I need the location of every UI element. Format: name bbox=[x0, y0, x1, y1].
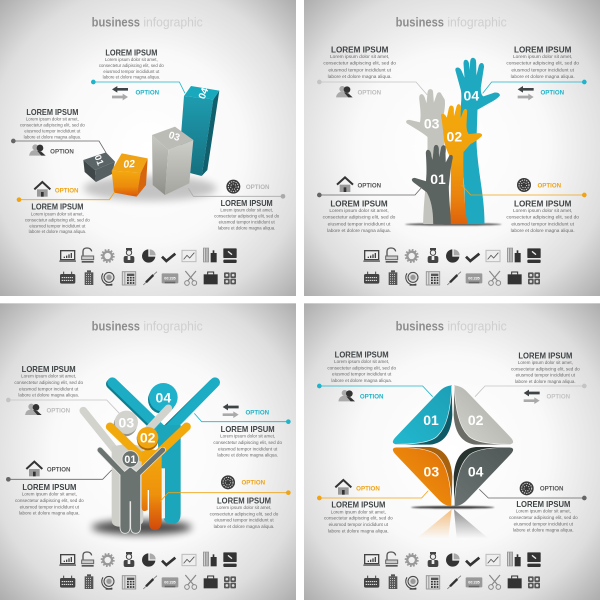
text block left: consectetur adipiscing elit, sed do bbox=[20, 123, 85, 129]
icon set: 00:235 bbox=[164, 580, 176, 584]
text block top left: consectetur adipiscing elit, sed do bbox=[323, 61, 396, 67]
option: globe orange bbox=[517, 178, 562, 192]
option: users teal: OPTION bbox=[360, 394, 384, 401]
option: users dark bbox=[29, 144, 74, 156]
3D bar chart bbox=[83, 86, 219, 201]
text block top left: Lorem ipsum dolor sit amet, bbox=[330, 54, 389, 60]
text block top right: labore et dolore magna aliqua. bbox=[515, 379, 576, 385]
text block top left bbox=[323, 44, 396, 80]
text block bottom right: Lorem ipsum dolor sit amet, bbox=[216, 505, 271, 511]
text block top right: eiusmod tempor incididunt ut bbox=[516, 373, 576, 379]
text block top left: consectetur adipiscing elit, sed do bbox=[327, 365, 396, 371]
text block top right: LOREM IPSUM bbox=[518, 350, 572, 360]
option: house orange: OPTION bbox=[356, 486, 380, 493]
hand 03: 03 bbox=[424, 116, 440, 132]
text block right: labore et dolore magna aliqua. bbox=[218, 225, 275, 231]
option: globe grey: OPTION bbox=[246, 184, 270, 191]
text block top left: eiusmod tempor incididunt ut bbox=[328, 67, 392, 73]
hand 01: 01 bbox=[430, 171, 446, 187]
title bbox=[396, 319, 507, 334]
text block top left: LOREM IPSUM bbox=[331, 44, 388, 54]
bar 01: 01 bbox=[93, 154, 105, 167]
text block bottom right: LOREM IPSUM bbox=[217, 495, 271, 505]
option: arrows teal: OPTION bbox=[135, 90, 160, 97]
text block right: labore et dolore magna aliqua. bbox=[217, 453, 278, 459]
text block bottom right bbox=[210, 495, 279, 530]
text block top right: Lorem ipsum dolor sit amet, bbox=[513, 54, 572, 60]
bar 04: 04 bbox=[197, 86, 211, 101]
text block top right bbox=[511, 350, 580, 385]
option: house orange bbox=[34, 182, 79, 197]
option: house dark bbox=[337, 177, 382, 192]
option: users light: OPTION bbox=[46, 407, 71, 414]
title: business bbox=[92, 15, 140, 30]
text block bottom left: consectetur adipiscing elit, sed do bbox=[15, 498, 84, 504]
icon set bbox=[363, 552, 541, 590]
option: arrows light: OPTION bbox=[546, 394, 571, 401]
text block bottom left: eiusmod tempor incididunt ut bbox=[329, 522, 389, 528]
text block top left: consectetur adipiscing elit, sed do bbox=[14, 380, 83, 386]
title: infographic bbox=[143, 15, 203, 30]
text block top left bbox=[327, 349, 396, 384]
diamond chart bbox=[393, 385, 513, 506]
text block left: Lorem ipsum dolor sit amet, bbox=[26, 117, 79, 123]
text block bottom left: labore et dolore magna aliqua. bbox=[328, 528, 389, 534]
text block top left: eiusmod tempor incididunt ut bbox=[332, 372, 392, 378]
text block bottom left: Lorem ipsum dolor sit amet, bbox=[329, 208, 389, 214]
text block top: consectetur adipiscing elit, sed do bbox=[99, 63, 164, 69]
petal 04: 04 bbox=[468, 463, 484, 479]
title: business bbox=[396, 15, 444, 30]
text block left: LOREM IPSUM bbox=[26, 107, 78, 117]
text block bottom right: Lorem ipsum dolor sit amet, bbox=[513, 208, 572, 214]
text block bottom left: consectetur adipiscing elit, sed do bbox=[324, 516, 393, 522]
option: globe dark: OPTION bbox=[540, 486, 564, 493]
icon set: 00:235 bbox=[164, 276, 176, 280]
text block bottom right: eiusmod tempor incididunt ut bbox=[514, 521, 574, 527]
petal 03: 03 bbox=[424, 463, 439, 479]
person 04 bbox=[111, 382, 215, 524]
text block top left: eiusmod tempor incididunt ut bbox=[19, 386, 79, 392]
option: globe orange: OPTION bbox=[241, 480, 266, 487]
text block right: eiusmod tempor incididunt ut bbox=[219, 220, 275, 226]
text block bottom right: eiusmod tempor incididunt ut bbox=[214, 518, 274, 524]
text block bottom right: consectetur adipiscing elit, sed do bbox=[509, 515, 578, 521]
text block right: consectetur adipiscing elit, sed do bbox=[213, 440, 282, 446]
text block bottom right: labore et dolore magna aliqua. bbox=[513, 528, 574, 534]
text block right: LOREM IPSUM bbox=[221, 424, 275, 434]
text block bottom left: consectetur adipiscing elit, sed do bbox=[323, 215, 396, 221]
panel: hands infographic bbox=[304, 0, 600, 296]
petal 02: 02 bbox=[468, 412, 484, 428]
hand 02 bbox=[442, 105, 481, 223]
connector lines bbox=[6, 398, 291, 502]
option: house dark bbox=[26, 462, 71, 476]
text block bottom left: Lorem ipsum dolor sit amet, bbox=[31, 211, 84, 217]
text block top left: Lorem ipsum dolor sit amet, bbox=[334, 359, 389, 365]
option: arrows teal bbox=[223, 404, 270, 418]
text block top right: consectetur adipiscing elit, sed do bbox=[506, 61, 579, 67]
text block top left: labore et dolore magna aliqua. bbox=[331, 378, 392, 384]
text block top: eiusmod tempor incididunt ut bbox=[103, 69, 160, 75]
text block top right: Lorem ipsum dolor sit amet, bbox=[518, 360, 573, 366]
title: business bbox=[396, 319, 444, 334]
text block bottom left: consectetur adipiscing elit, sed do bbox=[25, 217, 90, 223]
text block bottom right: labore et dolore magna aliqua. bbox=[214, 524, 274, 530]
title: infographic bbox=[143, 319, 203, 334]
hand 02: 02 bbox=[447, 129, 462, 145]
text block bottom right: labore et dolore magna aliqua. bbox=[511, 228, 575, 234]
text block top left bbox=[14, 364, 83, 399]
connector lines bbox=[317, 384, 587, 500]
person 03 bbox=[83, 408, 168, 527]
title: business bbox=[92, 319, 140, 334]
icon set bbox=[59, 552, 237, 590]
person 01 bbox=[100, 450, 163, 533]
option: globe dark bbox=[520, 481, 564, 495]
person 01: 01 bbox=[124, 454, 136, 466]
option: arrows teal bbox=[112, 86, 160, 100]
text block bottom left: labore et dolore magna aliqua. bbox=[327, 228, 391, 234]
option: users dark: OPTION bbox=[50, 149, 74, 156]
text block bottom left bbox=[15, 482, 84, 517]
option: globe orange: OPTION bbox=[537, 182, 562, 189]
person 02: 02 bbox=[140, 430, 156, 446]
text block bottom left: labore et dolore magna aliqua. bbox=[19, 511, 80, 517]
text block top left: labore et dolore magna aliqua. bbox=[18, 393, 79, 399]
text block bottom left: LOREM IPSUM bbox=[331, 500, 385, 510]
text block top left: LOREM IPSUM bbox=[22, 364, 76, 374]
text block bottom left: LOREM IPSUM bbox=[330, 198, 388, 208]
text block right: eiusmod tempor incididunt ut bbox=[218, 446, 278, 452]
text block bottom left: LOREM IPSUM bbox=[22, 482, 76, 492]
text block top right bbox=[506, 44, 579, 80]
text block left bbox=[20, 107, 85, 140]
text block bottom right bbox=[506, 198, 579, 234]
panel: bar chart infographic bbox=[0, 0, 296, 296]
option: arrows teal: OPTION bbox=[245, 409, 270, 416]
connector lines bbox=[317, 80, 587, 197]
text block bottom right: Lorem ipsum dolor sit amet, bbox=[516, 509, 571, 515]
title: infographic bbox=[447, 319, 507, 334]
text block top: LOREM IPSUM bbox=[105, 47, 157, 57]
text block bottom right: eiusmod tempor incididunt ut bbox=[511, 221, 575, 227]
text block bottom left: Lorem ipsum dolor sit amet, bbox=[22, 492, 77, 498]
text block bottom left: labore et dolore magna aliqua. bbox=[29, 229, 86, 235]
option: users teal bbox=[338, 390, 384, 401]
hand 04: 04 bbox=[464, 88, 479, 104]
option: house orange bbox=[335, 480, 380, 495]
option: house orange: OPTION bbox=[55, 187, 79, 194]
people chart bbox=[83, 382, 215, 535]
text block bottom right bbox=[509, 499, 578, 534]
text block top left: labore et dolore magna aliqua. bbox=[328, 74, 392, 80]
person 04: 04 bbox=[156, 389, 171, 405]
text block bottom left bbox=[324, 500, 393, 534]
text block top left: Lorem ipsum dolor sit amet, bbox=[21, 374, 76, 380]
text block bottom right: consectetur adipiscing elit, sed do bbox=[210, 511, 279, 517]
text block right bbox=[214, 198, 279, 231]
reflection bbox=[411, 506, 494, 538]
panel: diamond infographic bbox=[304, 303, 600, 600]
text block top left: LOREM IPSUM bbox=[335, 349, 389, 359]
title: infographic bbox=[447, 15, 507, 30]
option: users light bbox=[336, 86, 382, 97]
person 03: 03 bbox=[119, 414, 134, 430]
petal 01: 01 bbox=[423, 412, 439, 428]
text block left: eiusmod tempor incididunt ut bbox=[24, 129, 81, 135]
text block right: LOREM IPSUM bbox=[221, 198, 273, 208]
text block bottom left bbox=[25, 202, 90, 235]
option: globe grey bbox=[226, 180, 270, 194]
bar 02: 02 bbox=[123, 159, 136, 171]
icon set: 00:235 bbox=[468, 276, 480, 280]
text block left: labore et dolore magna aliqua. bbox=[24, 134, 81, 140]
icon set bbox=[363, 248, 541, 286]
option: users light: OPTION bbox=[357, 90, 382, 97]
text block top right: labore et dolore magna aliqua. bbox=[511, 74, 575, 80]
connector lines bbox=[11, 80, 285, 202]
text block bottom right: LOREM IPSUM bbox=[514, 198, 571, 208]
text block right: Lorem ipsum dolor sit amet, bbox=[220, 208, 273, 214]
text block bottom right: consectetur adipiscing elit, sed do bbox=[506, 215, 579, 221]
icon set: 00:235 bbox=[468, 580, 480, 584]
text block bottom left: eiusmod tempor incididunt ut bbox=[20, 504, 80, 510]
option: house dark: OPTION bbox=[47, 467, 71, 474]
hand 04 bbox=[456, 59, 499, 223]
text block bottom left: eiusmod tempor incididunt ut bbox=[328, 221, 391, 227]
option: arrows light bbox=[524, 390, 571, 404]
text block top bbox=[99, 47, 164, 81]
option: arrows teal bbox=[518, 86, 565, 100]
text block right bbox=[213, 424, 282, 459]
text block top: Lorem ipsum dolor sit amet, bbox=[105, 57, 158, 63]
text block top: labore et dolore magna aliqua. bbox=[103, 75, 160, 81]
hands chart bbox=[405, 59, 502, 226]
option: globe orange bbox=[221, 475, 266, 489]
text block top right: consectetur adipiscing elit, sed do bbox=[511, 366, 580, 372]
text block right: Lorem ipsum dolor sit amet, bbox=[220, 434, 275, 440]
title bbox=[92, 15, 203, 30]
title bbox=[396, 15, 507, 30]
hand 01 bbox=[413, 146, 452, 223]
person 02 bbox=[110, 427, 187, 530]
icon set bbox=[59, 248, 237, 286]
title bbox=[92, 319, 203, 334]
option: house dark: OPTION bbox=[357, 182, 382, 189]
text block bottom right: LOREM IPSUM bbox=[516, 499, 570, 509]
option: users light bbox=[25, 404, 71, 415]
text block bottom left: eiusmod tempor incididunt ut bbox=[29, 223, 86, 229]
text block bottom left: LOREM IPSUM bbox=[31, 202, 83, 212]
text block bottom left: Lorem ipsum dolor sit amet, bbox=[331, 509, 386, 515]
text block top right: eiusmod tempor incididunt ut bbox=[511, 67, 575, 73]
text block bottom left bbox=[323, 198, 396, 234]
panel: people infographic bbox=[0, 303, 296, 600]
text block top right: LOREM IPSUM bbox=[514, 44, 571, 54]
hand 03 bbox=[407, 90, 444, 223]
text block right: consectetur adipiscing elit, sed do bbox=[214, 214, 279, 220]
bar 03: 03 bbox=[167, 130, 182, 144]
option: arrows teal: OPTION bbox=[540, 90, 565, 97]
